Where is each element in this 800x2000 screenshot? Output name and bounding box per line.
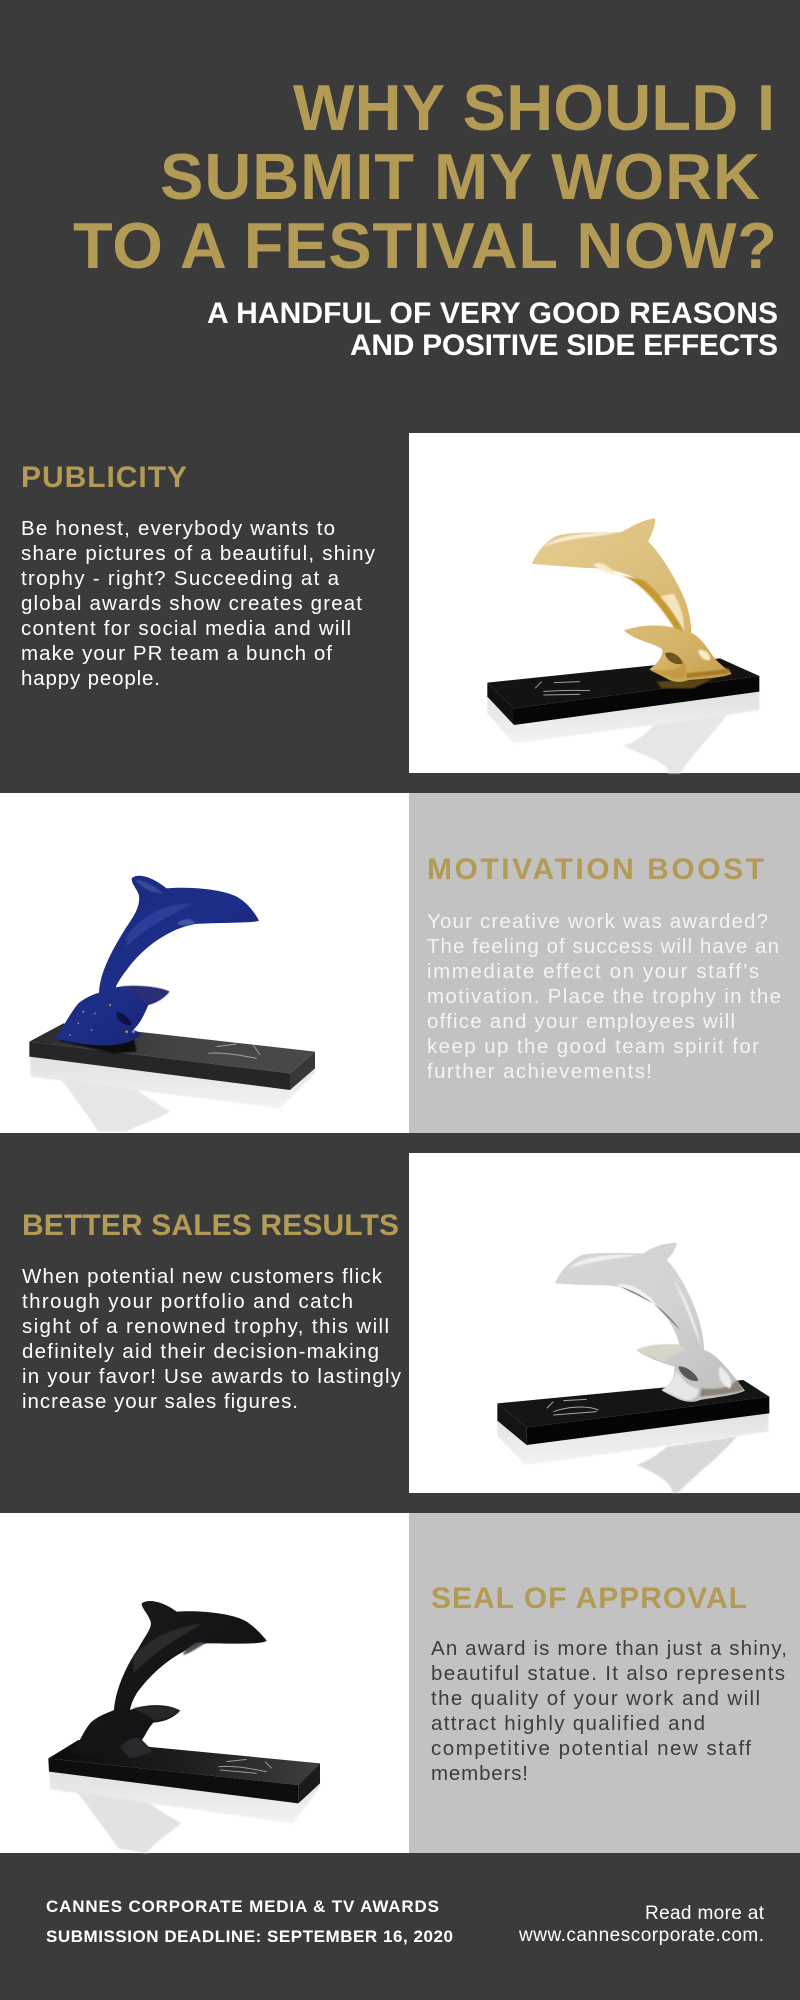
text block: award name and deadline: SUBMISSION DEADLINE: SEPTEMBER 16, 2020 <box>46 1927 453 1946</box>
heading: motivation boost: MOTIVATION BOOST <box>427 853 764 886</box>
text block: seal of approval: beautiful statue. It also represents <box>431 1662 785 1685</box>
text block: award name and deadline <box>46 1897 453 1946</box>
icon: black dolphin trophy <box>48 1601 320 1853</box>
title <box>73 71 777 282</box>
text block: publicity: global awards show creates great <box>21 592 362 615</box>
text block: seal of approval: competitive potential new staff <box>431 1737 751 1760</box>
text block: seal of approval: An award is more than just a shiny, <box>431 1637 787 1660</box>
text block: read more link <box>518 1903 765 1946</box>
text block: publicity: share pictures of a beautiful, shiny <box>21 542 376 565</box>
panel: seal of approval text <box>409 1513 800 1853</box>
text block: better sales results: in your favor! Use awards to lastingly <box>22 1365 402 1388</box>
text block: seal of approval: attract highly qualified and <box>431 1712 705 1735</box>
text block: better sales results: through your portfolio and catch <box>22 1290 353 1313</box>
text block: publicity: trophy - right? Succeeding at a <box>21 567 340 590</box>
text block: motivation boost: keep up the good team spirit for <box>427 1035 759 1058</box>
text block: publicity <box>21 517 376 690</box>
text block: publicity: content for social media and will <box>21 617 351 640</box>
text block: motivation boost: motivation. Place the trophy in the <box>427 985 781 1008</box>
panel: better sales results text <box>22 1209 402 1413</box>
panel: publicity text <box>21 461 376 690</box>
footer <box>46 1897 765 1946</box>
panel: motivation boost text <box>409 793 800 1133</box>
text block: better sales results: When potential new customers flick <box>22 1265 383 1288</box>
text block: motivation boost: The feeling of success will have an <box>427 935 779 958</box>
icon: blue dolphin trophy <box>29 876 315 1132</box>
text block: read more link: www.cannescorporate.com. <box>518 1925 764 1946</box>
text block: motivation boost: Your creative work was awarded? <box>427 910 768 933</box>
header <box>73 71 778 362</box>
text block: better sales results <box>22 1265 402 1413</box>
text block: publicity: happy people. <box>21 667 160 690</box>
panel: blue trophy image <box>0 793 409 1133</box>
subtitle <box>207 297 778 362</box>
text block: motivation boost: further achievements! <box>427 1060 652 1083</box>
heading: seal of approval: SEAL OF APPROVAL <box>431 1582 747 1615</box>
text block: seal of approval <box>431 1637 787 1785</box>
panel: gold trophy image <box>409 433 800 773</box>
text block: motivation boost: immediate effect on your staff’s <box>427 960 759 983</box>
heading: better sales results: BETTER SALES RESULTS <box>22 1209 399 1242</box>
text block: seal of approval: the quality of your work and will <box>431 1687 760 1710</box>
panel: black trophy image <box>0 1513 409 1853</box>
heading: publicity: PUBLICITY <box>21 461 187 494</box>
text block: publicity: Be honest, everybody wants to <box>21 517 335 540</box>
text block: motivation boost: office and your employees will <box>427 1010 735 1033</box>
text block: motivation boost <box>427 910 781 1083</box>
subtitle: AND POSITIVE SIDE EFFECTS <box>350 329 778 362</box>
title: WHY SHOULD I <box>293 71 775 144</box>
text block: seal of approval: members! <box>431 1762 528 1785</box>
title: SUBMIT MY WORK <box>160 140 760 213</box>
text block: publicity: make your PR team a bunch of <box>21 642 332 665</box>
subtitle: A HANDFUL OF VERY GOOD REASONS <box>207 297 778 330</box>
panel: silver trophy image <box>409 1153 800 1493</box>
title: TO A FESTIVAL NOW? <box>73 209 777 282</box>
text block: better sales results: definitely aid their decision-making <box>22 1340 379 1363</box>
icon: gold dolphin trophy <box>487 518 759 773</box>
text block: better sales results: sight of a renowned trophy, this will <box>22 1315 389 1338</box>
text block: better sales results: increase your sales figures. <box>22 1390 298 1413</box>
icon: silver dolphin trophy <box>497 1243 769 1493</box>
text block: award name and deadline: CANNES CORPORATE MEDIA & TV AWARDS <box>46 1897 439 1916</box>
text block: read more link: Read more at <box>645 1903 765 1924</box>
